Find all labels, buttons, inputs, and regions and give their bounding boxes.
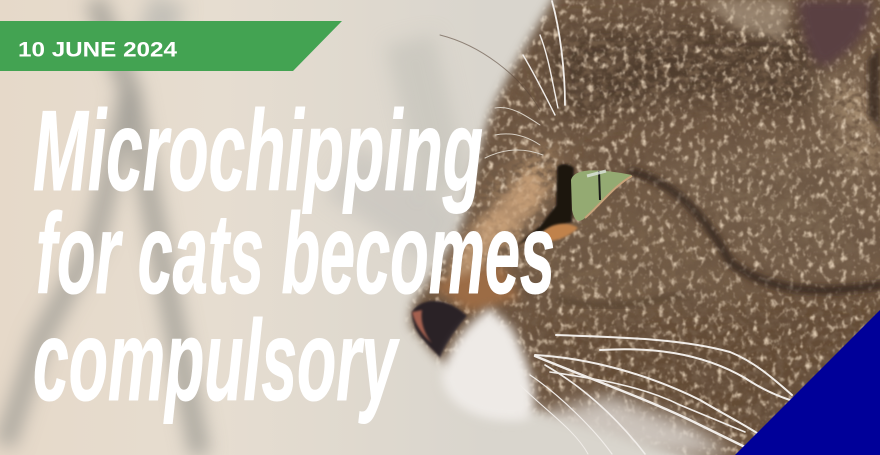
headline: Microchipping bbox=[33, 88, 483, 215]
headline bbox=[33, 88, 555, 425]
date ribbon bbox=[0, 21, 342, 71]
large tabby blotches bbox=[448, 45, 880, 292]
whiskers bbox=[440, 1, 792, 454]
date text: 10 JUNE 2024 bbox=[18, 38, 177, 62]
white muzzle bbox=[442, 308, 535, 421]
facial fold lines bbox=[560, 172, 880, 305]
cat head bbox=[380, 0, 880, 455]
fur base colour bbox=[380, 0, 880, 455]
nose bbox=[412, 301, 467, 358]
facial shading bbox=[430, 170, 548, 312]
ear bbox=[700, 0, 880, 130]
headline: compulsory bbox=[33, 298, 400, 425]
eye bbox=[515, 164, 632, 247]
fur light speckle bbox=[380, 0, 880, 455]
fur dark speckle bbox=[444, 6, 880, 444]
pale lower chin fur bbox=[500, 395, 735, 455]
blue corner triangle bbox=[735, 310, 880, 455]
blurred background bbox=[0, 0, 678, 455]
